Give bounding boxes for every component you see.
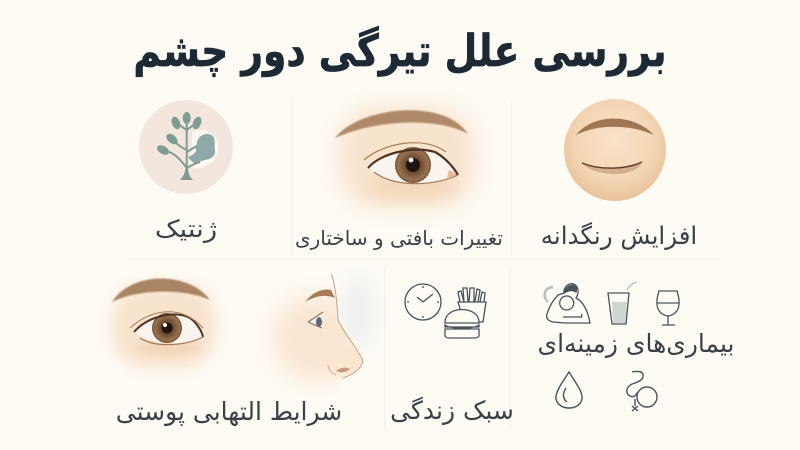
panel: inflammatory conditions [112,274,376,427]
panel: tissue changes [295,106,503,250]
icon: side profile [265,274,374,389]
icon: wine glass [657,291,679,325]
icon: water drop [556,372,582,408]
icon: fries and burger [445,288,486,338]
label: lifestyle: سبک زندگی [390,396,514,425]
icon: tree and head disc [139,100,233,194]
title: بررسی علل تیرگی دور چشم [133,25,667,78]
icon: front eye [112,278,216,368]
label: inflammatory conditions: شرایط التهابی پوستی [116,397,342,427]
icon: person with headache [545,284,590,323]
label: tissue changes: تغییرات بافتی و ساختاری [295,226,503,250]
icon: gender symbols [627,371,657,411]
icon: glass [608,282,637,324]
icon: closed eye disc [564,99,666,201]
label: pigmentation: افزایش رنگدانه [541,221,697,250]
label: underlying diseases: بیماری‌های زمینه‌ای [538,329,734,358]
panel: genetics [139,100,233,243]
panel: underlying diseases [538,282,734,411]
icon: clock [405,284,441,320]
panel: pigmentation [541,99,697,250]
icon: open eye [335,106,476,208]
label: genetics: ژنتیک [155,216,217,243]
panel: lifestyle [390,284,514,425]
